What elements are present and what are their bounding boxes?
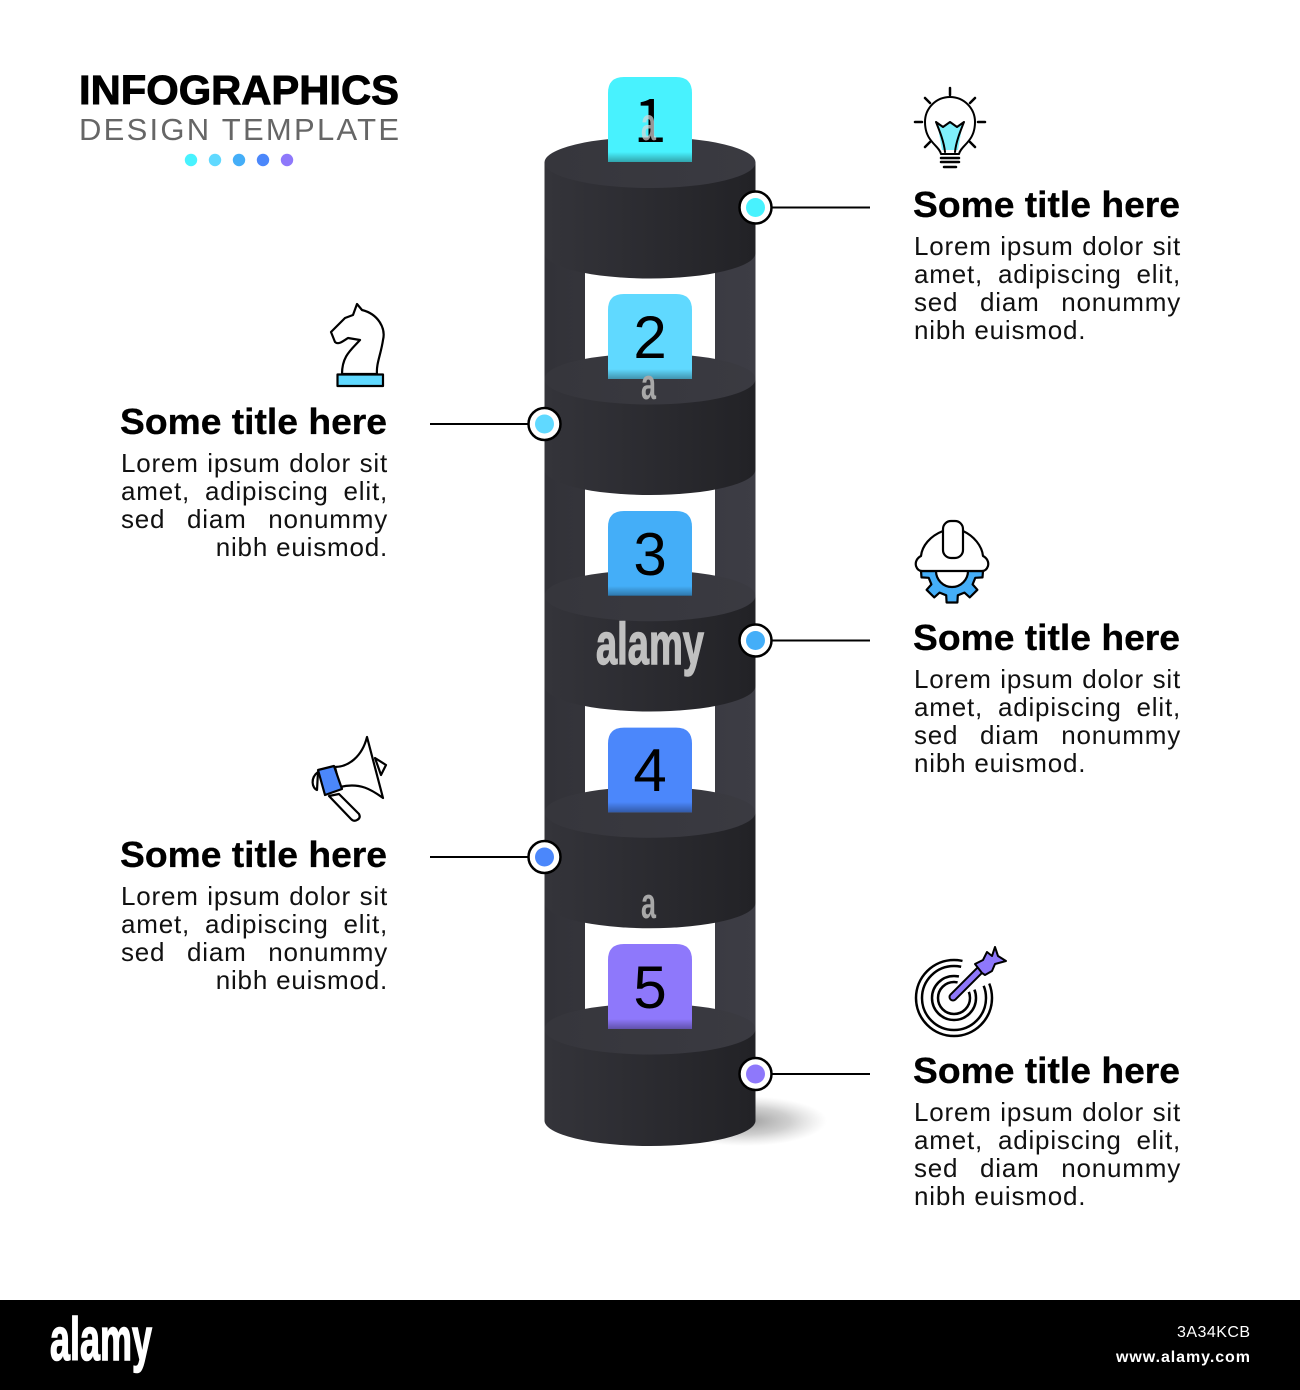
text 3: amet, adipiscing elit, [914,692,1181,722]
text 1: amet, adipiscing elit, [914,259,1181,289]
disc 3 [544,570,756,712]
text 1 [914,232,1181,344]
text 5: amet, adipiscing elit, [914,1125,1181,1155]
tab 1: 1 [633,73,667,160]
text 4: sed diam nonummy [121,937,388,967]
connector 5 [740,1058,870,1090]
icon: hard hat and gear [916,521,988,602]
tab 4 [608,728,692,812]
icon: megaphone [313,737,386,821]
subheading: DESIGN TEMPLATE [79,112,399,147]
disc 4 [544,787,756,928]
text 3: sed diam nonummy [914,720,1181,750]
connector 4 [430,841,560,873]
footer logo: alamy [50,1306,152,1373]
title 4: Some title here [120,834,387,875]
text 5: sed diam nonummy [914,1153,1181,1183]
text 2: amet, adipiscing elit, [121,476,388,506]
watermark: alamy [596,612,704,677]
tab 2 [608,294,692,379]
icon: target with arrow [916,947,1010,1036]
tab 3 [608,511,692,596]
watermark: a [641,879,656,928]
tab 3: 3 [633,521,667,588]
ground shadow [663,1096,827,1146]
watermark [596,98,704,928]
heading: INFOGRAPHICS [79,67,399,113]
connector 3 [740,624,870,656]
tab 4: 4 [633,737,667,804]
text 2: sed diam nonummy [121,504,388,534]
image id: 3A34KCB [1177,1324,1250,1341]
connector 1 [740,192,870,224]
disc 1 [544,137,756,278]
tab 1 [608,73,692,162]
watermark: a [641,98,656,150]
text 4: amet, adipiscing elit, [121,909,388,939]
text 3 [914,665,1181,777]
step dots [185,154,293,166]
title 2: Some title here [120,401,387,442]
icon: chess knight [331,304,384,386]
website: www.alamy.com [1115,1349,1250,1366]
tab 5 [608,944,692,1029]
title 3: Some title here [913,617,1180,658]
cylinder tower [544,137,756,1146]
text 4 [121,882,388,994]
title block [79,67,399,166]
icon: light bulb [915,88,985,167]
text 2 [121,449,388,561]
disc 5 [544,1004,756,1146]
title 5: Some title here [913,1050,1180,1091]
connector 2 [430,408,560,440]
text 5 [914,1098,1181,1210]
title 1: Some title here [913,184,1180,225]
tab 5: 5 [633,954,667,1021]
disc 2 [544,354,756,495]
watermark: a [641,360,656,409]
tab 2: 2 [633,304,667,371]
footer bar [0,1300,1300,1390]
text 1: sed diam nonummy [914,287,1181,317]
